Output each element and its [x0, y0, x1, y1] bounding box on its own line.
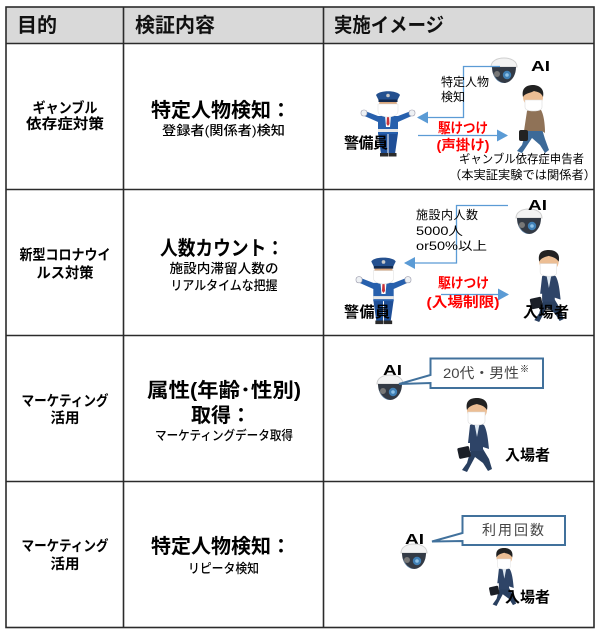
threshold text: 5000人	[416, 224, 463, 238]
person label: 入場者	[505, 589, 550, 606]
arrow: guard to person	[418, 134, 507, 136]
red action label: 駆けつけ	[438, 275, 489, 291]
purpose: gambling addiction	[26, 99, 105, 133]
callout: attributes	[399, 358, 543, 388]
purpose: COVID	[20, 247, 110, 282]
purpose: marketing row 4	[22, 537, 109, 573]
detection label: 検知	[441, 90, 465, 104]
icon: person	[457, 398, 492, 472]
threshold text: 施設内人数	[416, 207, 478, 222]
callout: usage count: 利用回数	[482, 522, 544, 538]
content: people count: 施設内滞留人数の	[170, 261, 278, 276]
purpose: marketing row 4: 活用	[50, 556, 80, 573]
panel: image row 1	[344, 58, 596, 182]
AI label: AI	[405, 531, 424, 548]
content: person detection: 登録者(関係者)検知	[162, 123, 285, 138]
icon: person	[530, 250, 564, 322]
icon: camera	[401, 544, 427, 569]
red action label: (声掛け)	[436, 137, 490, 153]
content: attribute acquisition: 属性(年齢･性別)	[147, 379, 301, 402]
icon: camera	[491, 58, 517, 83]
detection label: 特定人物	[441, 74, 489, 89]
detection label	[441, 74, 489, 104]
arrow: camera to guard	[418, 66, 500, 118]
content: attribute acquisition: 取得：	[191, 404, 251, 427]
purpose: marketing row 3: 活用	[50, 410, 80, 427]
AI label: AI	[528, 197, 547, 214]
red action label: (入場制限)	[426, 294, 500, 310]
content: repeater detection	[151, 535, 291, 576]
callout: attributes: 20代・男性	[443, 365, 519, 381]
threshold text	[416, 207, 487, 253]
content: repeater detection: 特定人物検知：	[151, 535, 291, 558]
content: people count: リアルタイムな把握	[170, 278, 278, 293]
red action label	[426, 275, 500, 310]
purpose column	[20, 99, 110, 573]
content: attribute acquisition	[147, 379, 301, 443]
content: person detection: 特定人物検知：	[151, 99, 291, 122]
icon: person	[517, 85, 549, 153]
guard label: 警備員	[344, 303, 390, 321]
content: people count: 人数カウント：	[160, 237, 284, 260]
content: repeater detection: リピータ検知	[188, 561, 259, 576]
content: attribute acquisition: マーケティングデータ取得	[155, 428, 293, 443]
callout: usage count	[432, 516, 565, 545]
panel: image row 2	[344, 197, 569, 324]
person caption	[449, 151, 596, 182]
icon: camera	[516, 209, 542, 234]
person caption: （本実証実験では関係者）	[449, 167, 596, 182]
table header background	[6, 7, 594, 43]
purpose: marketing row 3	[22, 392, 109, 427]
icon: guard	[356, 258, 411, 324]
person label: 入場者	[523, 304, 569, 321]
header: verification content: 検証内容	[135, 14, 215, 37]
header: implementation image: 実施イメージ	[334, 14, 444, 37]
content: person detection	[151, 99, 291, 138]
AI label: AI	[383, 362, 402, 379]
person caption: ギャンブル依存症申告者	[459, 151, 584, 166]
person label: 入場者	[505, 447, 550, 464]
purpose: gambling addiction: 依存症対策	[26, 115, 105, 133]
verification column	[147, 99, 301, 576]
header: purpose: 目的	[17, 14, 57, 37]
content: people count	[160, 237, 284, 293]
icon: person	[489, 548, 516, 606]
arrow: guard to person	[441, 294, 508, 296]
panel: image row 3	[377, 358, 550, 472]
arrow: camera to guard	[405, 206, 508, 263]
callout: attributes: ※	[520, 364, 529, 374]
icon: camera	[377, 375, 403, 400]
purpose: COVID: 新型コロナウイ	[20, 247, 110, 264]
purpose: COVID: ルス対策	[36, 264, 94, 282]
panel: image row 4	[401, 516, 565, 606]
threshold text: or50%以上	[416, 239, 487, 253]
purpose: marketing row 4: マーケティング	[22, 537, 109, 555]
header row	[17, 14, 444, 37]
red action label: 駆けつけ	[438, 120, 488, 136]
purpose: gambling addiction: ギャンブル	[32, 99, 98, 117]
icon: guard	[361, 91, 415, 156]
AI label: AI	[531, 58, 550, 75]
guard label: 警備員	[344, 134, 388, 152]
purpose: marketing row 3: マーケティング	[22, 392, 109, 410]
red action label	[436, 120, 490, 153]
